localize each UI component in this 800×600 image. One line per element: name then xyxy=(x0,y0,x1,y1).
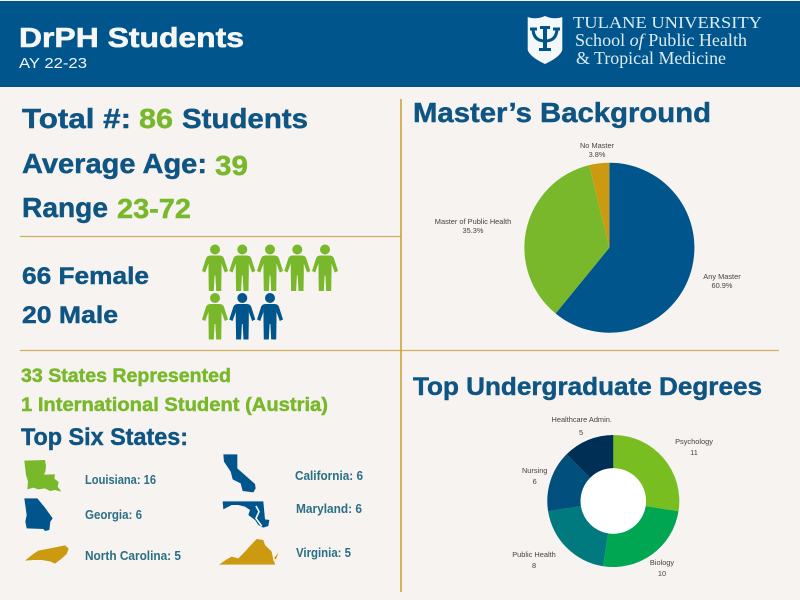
icon: people pictogram xyxy=(202,244,338,340)
stat: total students: Students xyxy=(182,103,308,134)
pie chart xyxy=(435,141,741,333)
stat: total students: Total #: xyxy=(22,103,131,134)
icon: North Carolina xyxy=(25,545,69,564)
title: DrPH Students xyxy=(19,22,244,53)
logo line 3: & Tropical Medicine xyxy=(576,48,726,68)
icon: shield xyxy=(528,16,562,64)
stat: average age: 39 xyxy=(215,150,248,181)
label: Louisiana: Louisiana: 16 xyxy=(85,473,156,487)
label: no master: 3.8% xyxy=(589,150,606,159)
stat: total students xyxy=(22,103,308,134)
logo line 1: TULANE UNIVERSITY xyxy=(573,13,762,32)
icon: Georgia xyxy=(24,498,53,531)
label: psychology: 11 xyxy=(690,448,698,457)
icon: California xyxy=(223,454,256,492)
icon: Virginia xyxy=(219,539,278,565)
label: healthcare admin: Healthcare Admin. xyxy=(552,415,612,424)
label: master of public health: Master of Public Health xyxy=(435,217,511,226)
label: healthcare admin: 5 xyxy=(579,428,583,437)
label: biology: Biology xyxy=(650,558,674,567)
logo: Tulane University School of Public Health xyxy=(528,13,762,68)
male count: 20 Male xyxy=(22,302,118,329)
header band xyxy=(0,1,800,87)
label: public health: Public Health xyxy=(512,550,556,559)
label: any master: Any Master xyxy=(703,272,741,281)
logo line 2: School of Public Health xyxy=(575,30,747,50)
icon: Maryland xyxy=(223,501,269,528)
donut chart xyxy=(512,415,713,578)
states represented: 33 States Represented xyxy=(21,366,231,387)
label: master of public health: 35.3% xyxy=(463,226,484,235)
female count: 66 Female xyxy=(22,263,149,290)
label: nursing: 6 xyxy=(533,477,537,486)
icon: Louisiana xyxy=(24,460,61,492)
label: biology: 10 xyxy=(658,569,666,578)
label: North Carolina: North Carolina: 5 xyxy=(85,549,181,563)
label: Georgia: Georgia: 6 xyxy=(85,508,142,522)
label: nursing: Nursing xyxy=(522,466,547,475)
label: Maryland: Maryland: 6 xyxy=(296,502,362,516)
panel: master's background xyxy=(413,97,741,333)
label: psychology: Psychology xyxy=(675,437,713,446)
international student: 1 International Student (Austria) xyxy=(21,395,328,416)
label: no master: No Master xyxy=(580,141,614,150)
panel: geography xyxy=(21,366,363,565)
label: public health: 8 xyxy=(532,561,536,570)
stat: age range: Range xyxy=(22,192,108,223)
heading: top six states: Top Six States: xyxy=(21,424,188,451)
heading: top undergraduate degrees: Top Undergraduate Degrees xyxy=(413,373,762,401)
heading: master's background: Master’s Background xyxy=(413,97,711,128)
label: California: California: 6 xyxy=(295,469,363,483)
panel: overview stats xyxy=(22,103,308,224)
stat: age range xyxy=(22,192,191,224)
label: Virginia: Virginia: 5 xyxy=(296,546,351,560)
panel: gender xyxy=(22,244,338,340)
subtitle: AY 22-23 xyxy=(19,55,87,72)
label: any master: 60.9% xyxy=(712,281,733,290)
stat: average age: Average Age: xyxy=(22,148,207,179)
stat: total students: 86 xyxy=(139,103,173,134)
panel: undergraduate degrees xyxy=(413,373,762,578)
stat: age range: 23-72 xyxy=(117,193,191,224)
